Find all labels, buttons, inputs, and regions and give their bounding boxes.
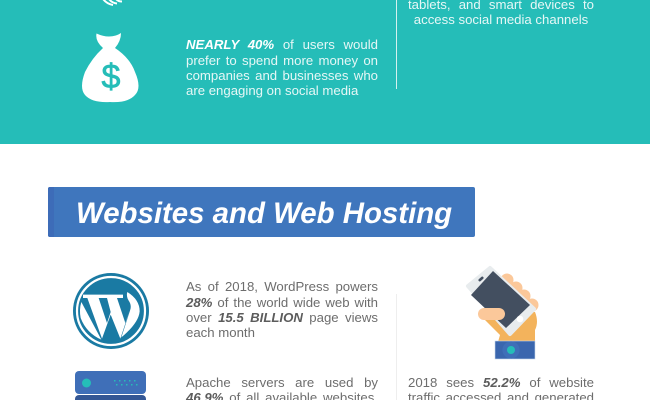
icon: hand holding phone <box>466 266 538 360</box>
text: apache stat <box>186 375 378 400</box>
text: wordpress stat <box>186 279 378 340</box>
text: tablets and smart devices: access social media channels <box>414 12 588 27</box>
text: nearly 40 percent <box>186 37 378 98</box>
divider <box>396 0 397 89</box>
text: mobile traffic stat: 2018 sees 52.2% of website <box>408 375 594 390</box>
text: nearly 40 percent: NEARLY 40% of users would <box>186 37 378 52</box>
heading banner: websites and web hosting <box>48 187 475 237</box>
text: wordpress stat: each month <box>186 325 255 340</box>
text: wordpress stat: 28% of the world wide web with <box>186 295 378 310</box>
icon: server stack <box>75 371 146 400</box>
server unit top <box>75 371 146 400</box>
text: nearly 40 percent: are engaging on social media <box>186 83 358 98</box>
text: wordpress stat: over 15.5 BILLION page views <box>186 310 378 325</box>
text: mobile traffic stat <box>408 375 594 400</box>
text: tablets and smart devices <box>408 0 594 27</box>
icon: money bag: $ <box>102 58 121 96</box>
heading text: Websites and Web Hosting <box>76 196 452 230</box>
divider <box>396 294 397 400</box>
icon: money bag <box>82 33 138 102</box>
panel: teal social media section <box>0 0 650 144</box>
text: wordpress stat: As of 2018, WordPress powers <box>186 279 378 294</box>
text: nearly 40 percent: prefer to spend more money on <box>186 53 378 68</box>
text: apache stat: Apache servers are used by <box>186 375 378 390</box>
icon: wifi arcs <box>102 0 122 6</box>
text: nearly 40 percent: companies and businesses who <box>186 68 378 83</box>
icon: wordpress logo <box>73 273 149 349</box>
